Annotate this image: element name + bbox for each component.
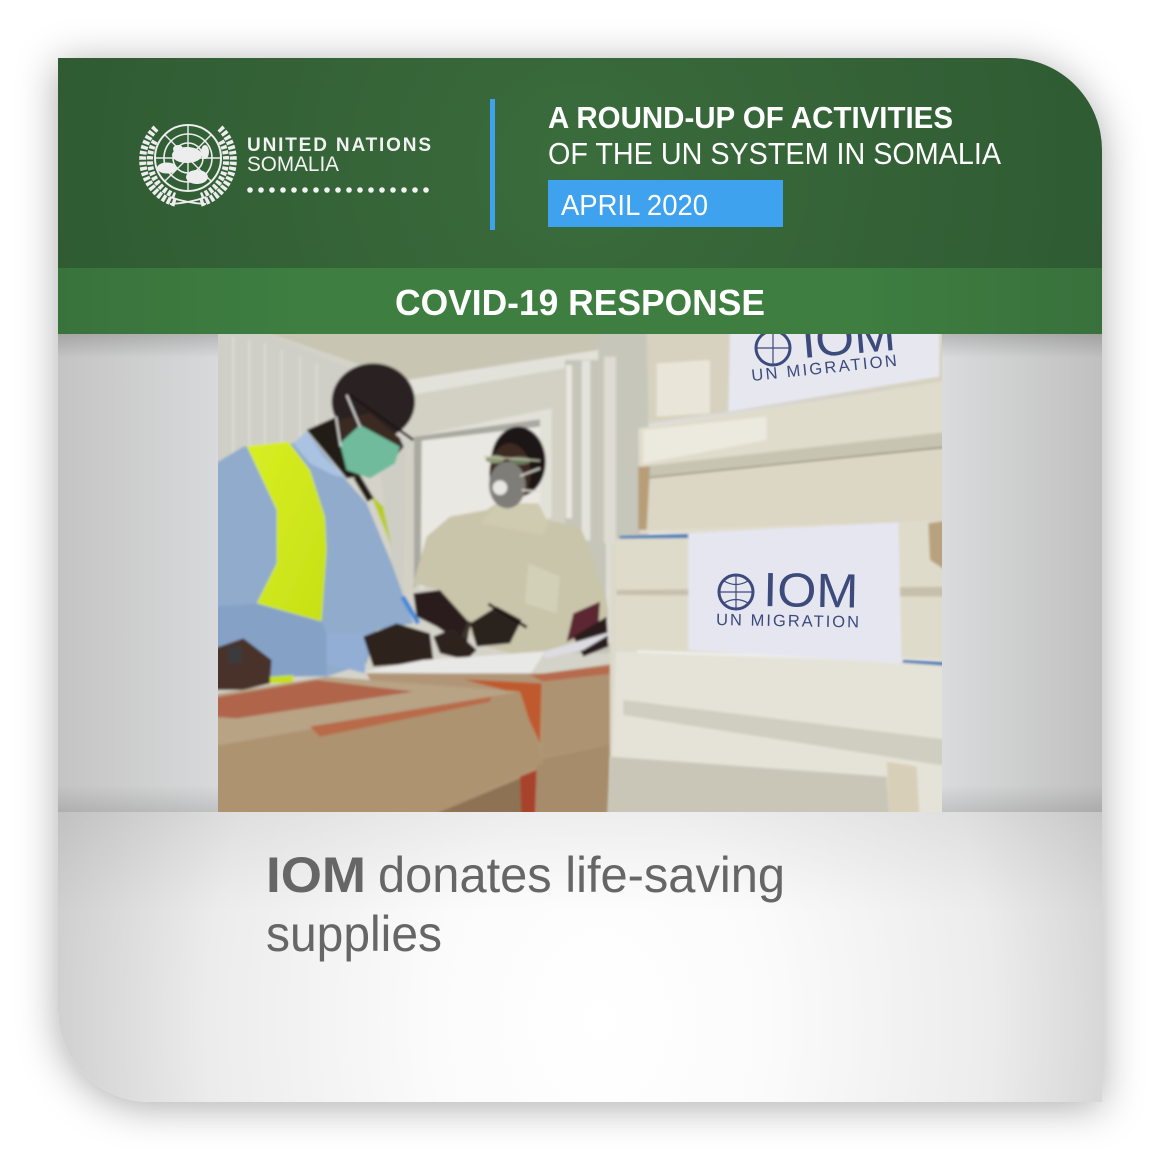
left part of photo: two masked men at cardboard boxes <box>203 323 637 827</box>
caption headline: supplies <box>266 906 442 962</box>
header title: A ROUND-UP OF ACTIVITIES <box>548 100 953 135</box>
papers <box>363 652 545 675</box>
man on the left <box>210 432 413 677</box>
boxes <box>367 663 617 823</box>
IOM sign on lower box: IOM <box>763 564 859 619</box>
man on the right <box>413 503 608 653</box>
UN emblem <box>143 125 233 204</box>
header title: OF THE UN SYSTEM IN SOMALIA <box>548 136 1001 171</box>
header title <box>548 100 1001 171</box>
UN Somalia wordmark <box>247 135 431 193</box>
caption headline <box>266 847 785 962</box>
IOM sign on upper box: IOM <box>799 308 898 369</box>
section band: COVID-19 RESPONSE <box>395 282 765 323</box>
caption headline: donates life-saving <box>378 847 785 903</box>
IOM sign on upper box: UN MIGRATION <box>751 352 898 385</box>
date badge <box>548 180 783 227</box>
UN Somalia wordmark: UNITED NATIONS <box>247 135 431 156</box>
caption headline: IOM <box>266 847 366 903</box>
photo: IOM staff checking supplies <box>218 334 942 812</box>
blue divider <box>490 99 495 230</box>
section band <box>58 268 1102 334</box>
header banner <box>58 58 1102 268</box>
IOM sign on lower box: UN MIGRATION <box>716 611 859 631</box>
right part of photo: stacked white supply boxes <box>598 330 950 823</box>
IOM sign on upper box <box>752 334 896 381</box>
IOM sign on lower box <box>717 573 858 628</box>
date badge: APRIL 2020 <box>561 190 708 222</box>
UN Somalia wordmark: SOMALIA <box>247 153 339 176</box>
